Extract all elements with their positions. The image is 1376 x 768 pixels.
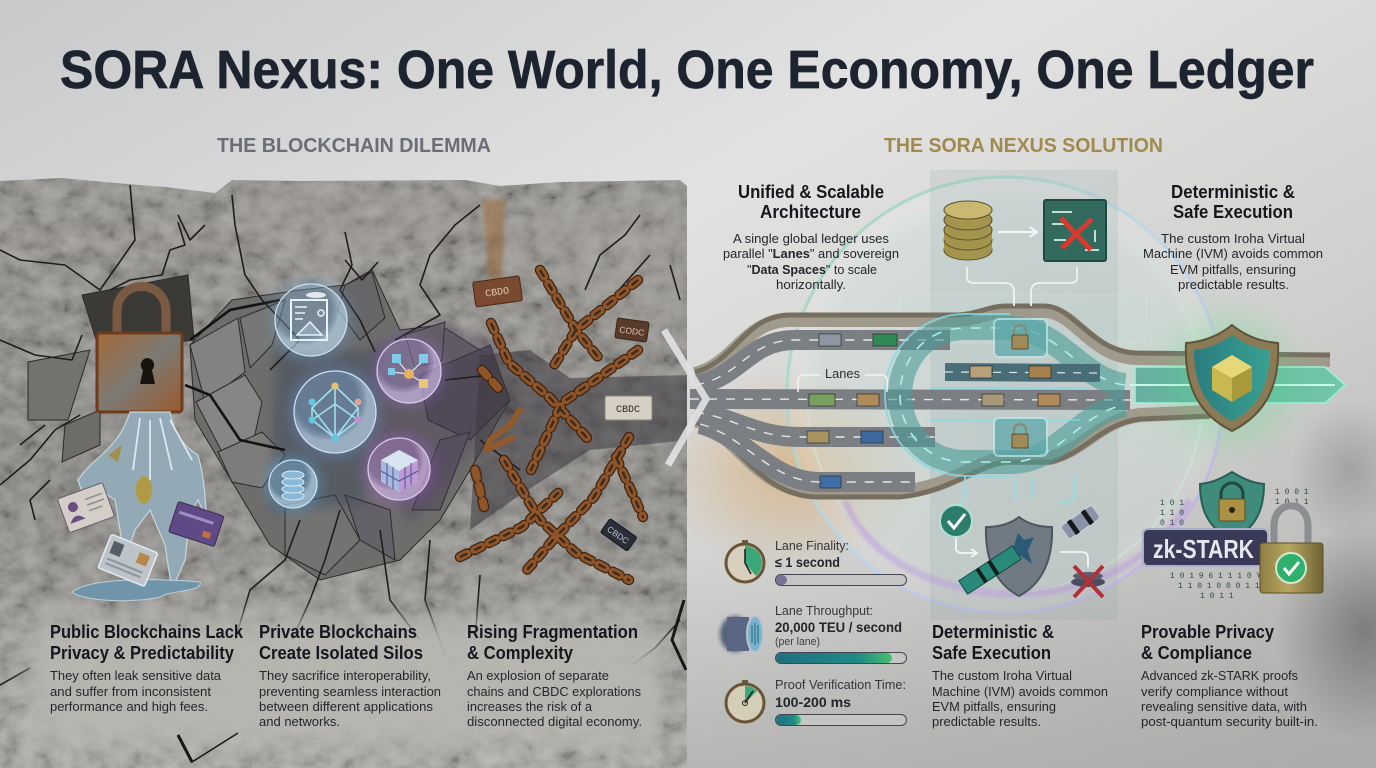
metric: proof verification time [726,678,906,726]
binary digits: 0 1 0 [1160,519,1184,528]
padlock body [97,333,182,412]
text block: provable privacy: Advanced zk-STARK proofs [1141,668,1298,683]
text block: public blockchains: They often leak sensitive data [50,668,222,683]
text block: provable privacy: Provable Privacy [1141,622,1274,642]
illustration: zk-STARK privacy [1143,472,1323,601]
icon: shield with gold cube [1170,318,1294,442]
teal oval interchange [900,328,1125,462]
icon: leaking rusty padlock [57,286,224,601]
icon: isolated bubbles [263,276,447,514]
text block: private blockchains: between different applications [259,699,433,714]
binary digits: 1 1 0 [1160,509,1184,518]
text block: deterministic top [1143,182,1323,292]
text block: deterministic top: Deterministic & [1171,182,1295,202]
keyhole [140,358,155,384]
chevron arrow [664,330,706,465]
tag: CODC [615,318,649,342]
database stack [944,201,992,260]
metric: lane throughput: 20,000 TEU / second [775,620,902,635]
contract with red X [1044,200,1106,261]
text block: deterministic top: predictable results. [1178,277,1289,292]
lanes [690,340,1130,482]
text block: unified architecture: parallel "Lanes" and sovereign [723,246,899,261]
text block: deterministic top: Machine (IVM) avoids common [1143,246,1323,261]
bubble: database [263,454,323,514]
text block: public blockchains: Public Blockchains Lack [50,622,244,642]
lighter broken patches [235,182,685,330]
label: lanes: Lanes [825,366,860,381]
text block: deterministic top: Safe Execution [1173,202,1293,222]
text block: deterministic bottom: The custom Iroha Virtual [932,668,1072,683]
text block: unified architecture: Architecture [760,202,861,222]
tag: CBDC: CBDC [616,405,640,416]
binary digits: 1 0 0 1 [1275,488,1309,497]
text block: deterministic top: The custom Iroha Virtual [1161,231,1305,246]
text block: private blockchains: Create Isolated Silos [259,643,423,663]
ID card [57,483,115,533]
binary digits: 1 1 0 1 0 0 0 1 1 [1178,582,1260,591]
icon: stopwatch [726,680,764,722]
tag: dark CBDC: CBDC [605,524,631,546]
text block: deterministic bottom: predictable results. [932,714,1041,729]
output arrow [1130,367,1345,403]
label: lanes [798,366,887,392]
gold coin fragments [136,476,152,504]
metric: proof verification time: Proof Verification Time: [775,678,906,692]
bubble: nodes [371,333,447,409]
connectors [967,267,1077,306]
text block: provable privacy: revealing sensitive data, with [1141,699,1307,714]
dark purple band leading to arrow [470,350,690,530]
bubble: network [287,364,383,460]
glass lock: top [994,319,1047,357]
highway network [690,306,1330,497]
outer rails [695,311,1330,374]
text block: unified architecture: horizontally. [776,277,846,292]
text block: private blockchains: They sacrifice interoperability, [259,668,431,683]
heading: the sora nexus solution: THE SORA NEXUS SOLUTION [884,135,1163,157]
credit card [169,501,224,547]
icon: cylinder [720,616,763,652]
icon: check badge [940,505,972,537]
bubble: cube [361,431,437,507]
vehicles [807,334,1060,488]
text block: rising fragmentation: & Complexity [467,643,573,663]
text block: deterministic bottom: Deterministic & [932,622,1054,642]
metric: lane finality [726,539,906,586]
text block: public blockchains: Privacy & Predictability [50,643,234,663]
broken link [486,410,520,450]
tag: CODC: CODC [619,324,645,338]
metric: lane finality: Lane Finality: [775,539,849,553]
binary digits: 1 0 1 1 [1200,592,1234,601]
dark stone blocks around bubbles [190,270,510,580]
rising connectors [958,476,1075,505]
text block: private blockchains: Private Blockchains [259,622,417,642]
icon: cracked shield [986,517,1052,596]
metric: lane throughput: Lane Throughput: [775,604,873,618]
metric: proof verification time: 100-200 ms [775,695,851,710]
binary digits [1160,488,1309,601]
icon: deflected car [1060,505,1101,540]
wash behind text [30,618,660,746]
text block: deterministic top: EVM pitfalls, ensuring [1170,262,1296,277]
text block: rising fragmentation: Rising Fragmentation [467,622,638,642]
text block: rising fragmentation: disconnected digital economy. [467,714,642,729]
metric: lane throughput: (per lane) [775,636,820,648]
text block: rising fragmentation: increases the risk of a [467,699,593,714]
rust streak [482,200,505,290]
text block: provable privacy: & Compliance [1141,643,1252,663]
binary digits: 1 0 1 1 [1275,498,1309,507]
text block: private blockchains: preventing seamless interaction [259,684,441,699]
text block: unified architecture: Unified & Scalable [738,182,884,202]
cracks [0,185,680,685]
icon: database to rejected contract [944,200,1106,306]
text block: private blockchains: and networks. [259,714,340,729]
metric: lane throughput [720,604,906,664]
text block: rising fragmentation: An explosion of separate [467,668,609,683]
metric: lane finality: ≤ 1 second [775,555,840,570]
lower connectors and safe-execution icons [940,476,1105,597]
water leak [78,412,207,590]
text block: deterministic bottom: Safe Execution [932,643,1051,663]
puddle [72,580,200,601]
text block: provable privacy: post-quantum security built-in. [1141,714,1318,729]
identity card on floor [98,534,158,586]
text block: rising fragmentation [467,622,642,729]
text block: public blockchains: performance and high fees. [50,699,208,714]
text block: private blockchains [259,622,441,729]
binary digits: 1 0 1 [1160,499,1184,508]
text block: public blockchains: and suffer from inconsistent [50,684,211,699]
zk-STARK label: zk-STARK [1153,534,1254,564]
text block: deterministic bottom: Machine (IVM) avoids common [932,684,1108,699]
illustration: rusty chains and CBDC tags [460,270,643,580]
flow arrow [998,227,1037,237]
icon: padlock with check [1260,506,1323,593]
lower cracks [178,600,686,762]
text block: unified architecture [723,182,899,292]
text block: provable privacy [1141,622,1318,729]
glass lock: bottom [994,418,1047,456]
title: SORA Nexus: One World, One Economy, One Ledger [60,40,1314,100]
binary digits: 1 0 1 9 6 1 1 1 0 Y 1 [1170,572,1271,581]
text block: public blockchains [50,622,244,714]
tag: CBDO: CBDO [485,286,510,301]
icon: stopwatch [726,540,764,582]
panel: cracked concrete wall [0,170,690,768]
text block: unified architecture: "Data Spaces" to scale [747,262,877,277]
text block: deterministic bottom: EVM pitfalls, ensuring [932,699,1056,714]
tag: CBDC [605,396,652,420]
tag: dark CBDC [600,518,637,551]
icon: back shield [1200,472,1264,540]
glass ring and panels [787,170,1223,620]
teal capsule [959,546,1021,594]
tag: CBDO [473,276,523,307]
text block: deterministic bottom [932,622,1108,729]
text block: rising fragmentation: chains and CBDC explorations [467,684,641,699]
icon: rejected stack [1071,566,1105,597]
heading: the blockchain dilemma: THE BLOCKCHAIN DILEMMA [217,135,491,157]
bubble: document [267,276,355,364]
padlock shackle [117,286,166,338]
text block: provable privacy: verify compliance without [1141,684,1288,699]
text block: unified architecture: A single global ledger uses [733,231,889,246]
